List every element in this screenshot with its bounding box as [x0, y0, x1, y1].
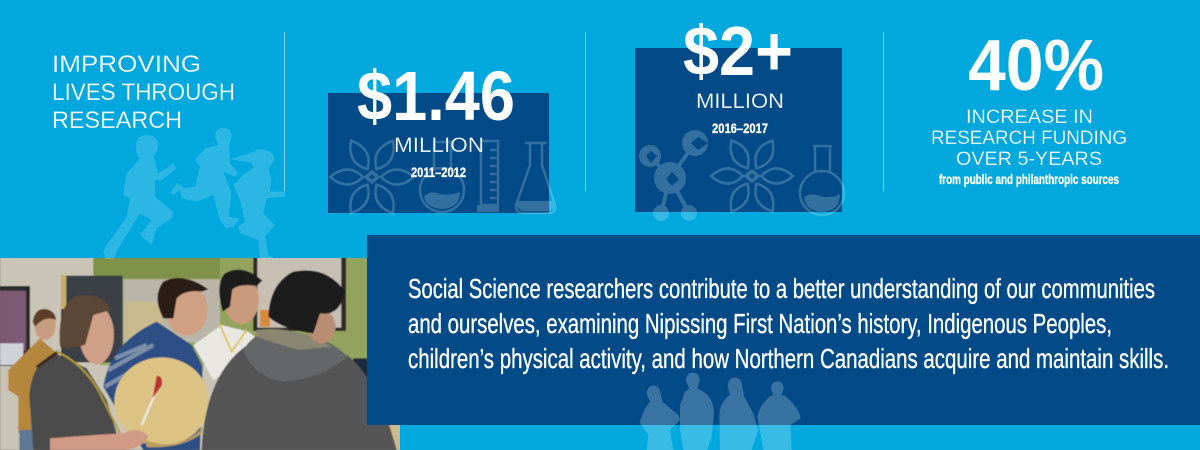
heading: improving lives through research [52, 51, 235, 134]
stat: $1.46 million 2011-2012 [357, 57, 515, 180]
student in blue striped sweater [103, 278, 208, 450]
man in grey t-shirt [29, 295, 148, 450]
stat: $2+ million 2016-2017: MILLION [696, 90, 784, 113]
icon: molecule [639, 130, 708, 221]
stat: 40% increase in research funding: from public and philanthropic sources [939, 172, 1119, 187]
panel: 2011-2012 box [328, 93, 549, 213]
stat: $2+ million 2016-2017: $2+ [683, 12, 793, 90]
icon: test cylinder [477, 141, 499, 212]
panel: 2016-2017 box [635, 48, 842, 212]
student in white shirt [193, 270, 262, 380]
heading: improving lives through research: IMPROVING [52, 51, 201, 78]
text block: social science description [408, 273, 1169, 374]
icon: round flask right [800, 146, 844, 215]
stat: 40% increase in research funding: 40% [968, 26, 1104, 106]
icon: running children silhouettes [103, 127, 285, 260]
icon: atom right [711, 137, 793, 215]
panel: description box [367, 235, 1200, 425]
stat: $1.46 million 2011-2012: $1.46 [357, 57, 515, 135]
stat: 40% increase in research funding: INCREASE IN [966, 107, 1093, 128]
icon: atom left [330, 137, 414, 217]
panel: photo of students drumming [0, 258, 400, 450]
stat: 40% increase in research funding: OVER 5-YEARS [956, 149, 1102, 170]
heading: improving lives through research: LIVES THROUGH [52, 79, 235, 106]
drum [114, 357, 209, 447]
divider 2 [585, 32, 586, 191]
man in grey hoodie [202, 270, 397, 450]
icon: round flask left [420, 142, 464, 212]
heading: improving lives through research: RESEARCH [52, 107, 182, 134]
stat: $2+ million 2016-2017: 2016–2017 [712, 120, 768, 136]
stat: $1.46 million 2011-2012: MILLION [394, 134, 484, 157]
divider 3 [883, 32, 884, 191]
stat: 40% increase in research funding: RESEARCH FUNDING [931, 128, 1127, 149]
man in tan jacket [8, 309, 56, 450]
divider 1 [284, 32, 285, 191]
icon: conical flask [516, 143, 555, 213]
stat: $1.46 million 2011-2012: 2011–2012 [411, 164, 466, 180]
stat: 40% increase in research funding [931, 26, 1127, 187]
stat: $2+ million 2016-2017 [683, 12, 793, 136]
icon: people silhouettes [639, 373, 801, 450]
